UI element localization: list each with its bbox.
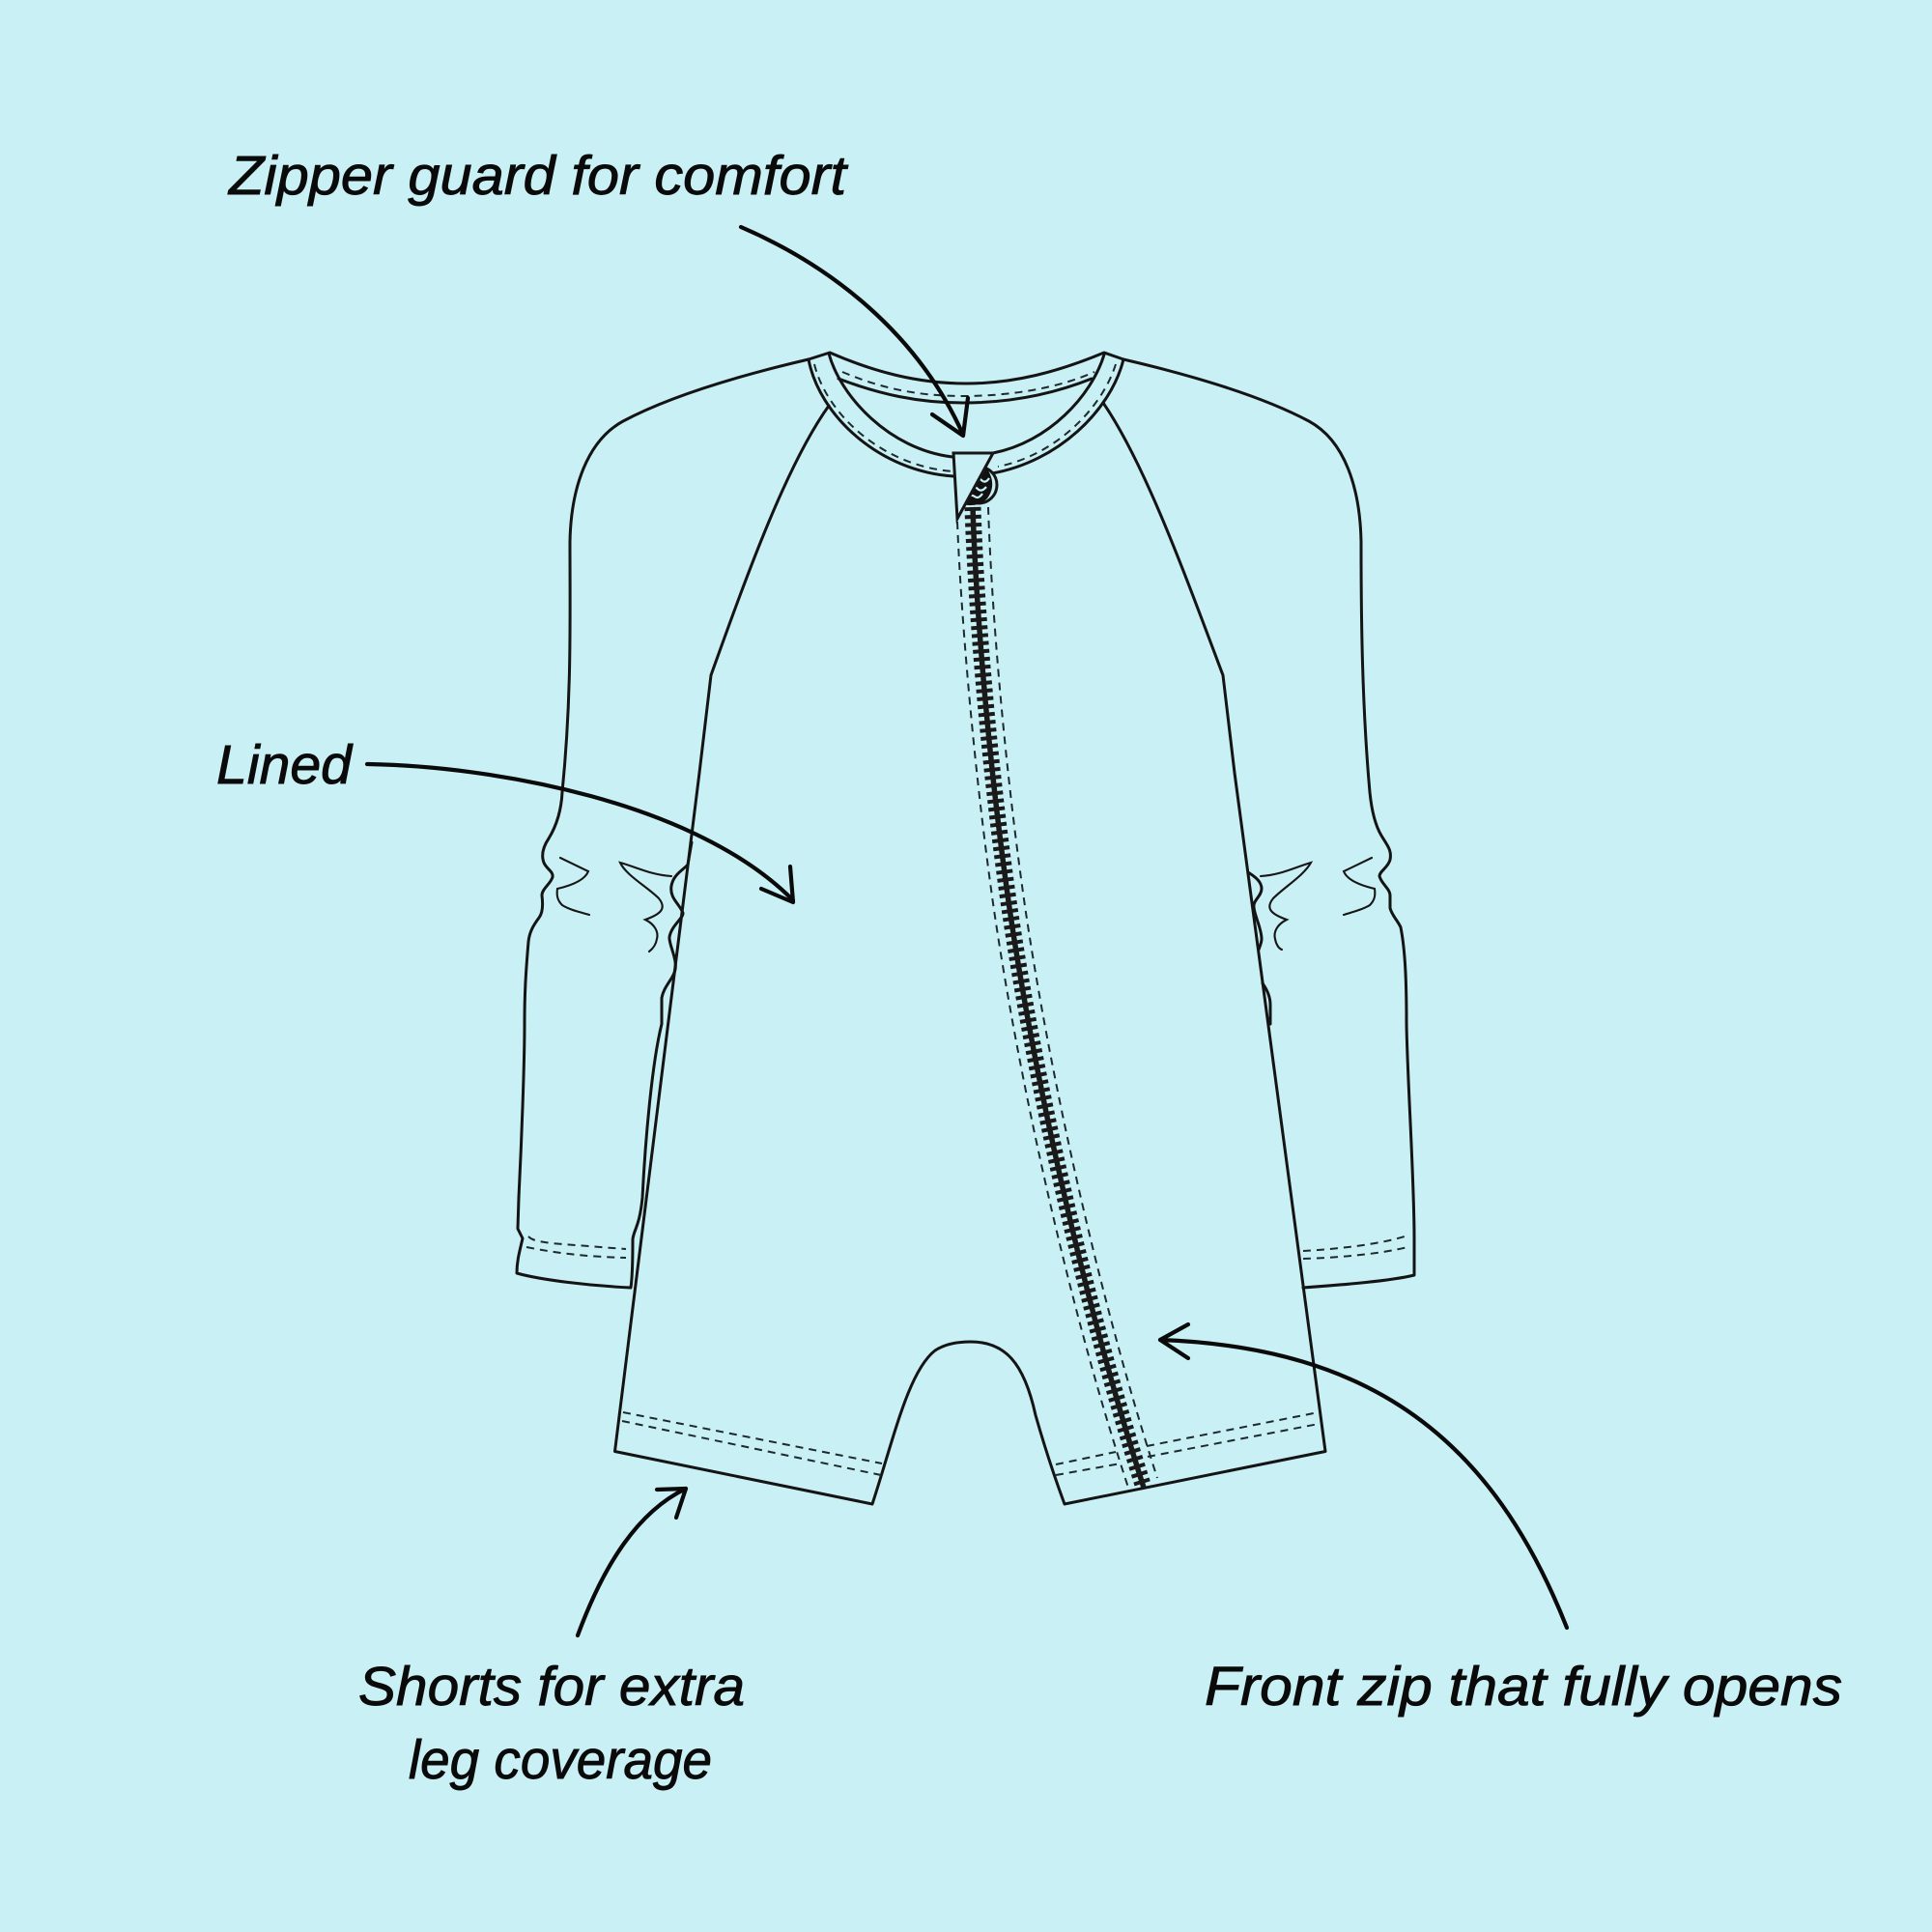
right hem stitching	[1056, 1412, 1319, 1464]
garment: swimsuit line drawing	[517, 353, 1414, 1504]
collar	[809, 353, 1123, 476]
label: shorts: leg coverage	[409, 1729, 712, 1791]
arrow: shorts	[578, 1489, 686, 1635]
body outline	[614, 403, 1325, 1504]
label: front zip: Front zip that fully opens	[1205, 1656, 1842, 1718]
arrow: lined	[367, 764, 793, 902]
zipper pull logo	[960, 467, 997, 505]
left hem stitching	[623, 1412, 882, 1463]
arrow: front zip	[1160, 1324, 1567, 1628]
right cuff stitching	[1303, 1236, 1407, 1251]
label: lined: Lined	[216, 734, 354, 796]
right elbow wrinkles	[1344, 858, 1375, 915]
left elbow wrinkles	[557, 858, 589, 915]
label: shorts	[358, 1656, 745, 1791]
left sleeve	[517, 359, 809, 1288]
right sleeve	[1123, 359, 1414, 1288]
label: zipper guard: Zipper guard for comfort	[227, 145, 848, 207]
zipper stitching	[957, 522, 1128, 1488]
zipper teeth	[973, 507, 1144, 1488]
arrow: zipper guard	[741, 227, 968, 436]
zipper guard	[953, 453, 993, 519]
label: shorts: Shorts for extra	[358, 1656, 745, 1718]
left cuff stitching	[528, 1236, 626, 1249]
